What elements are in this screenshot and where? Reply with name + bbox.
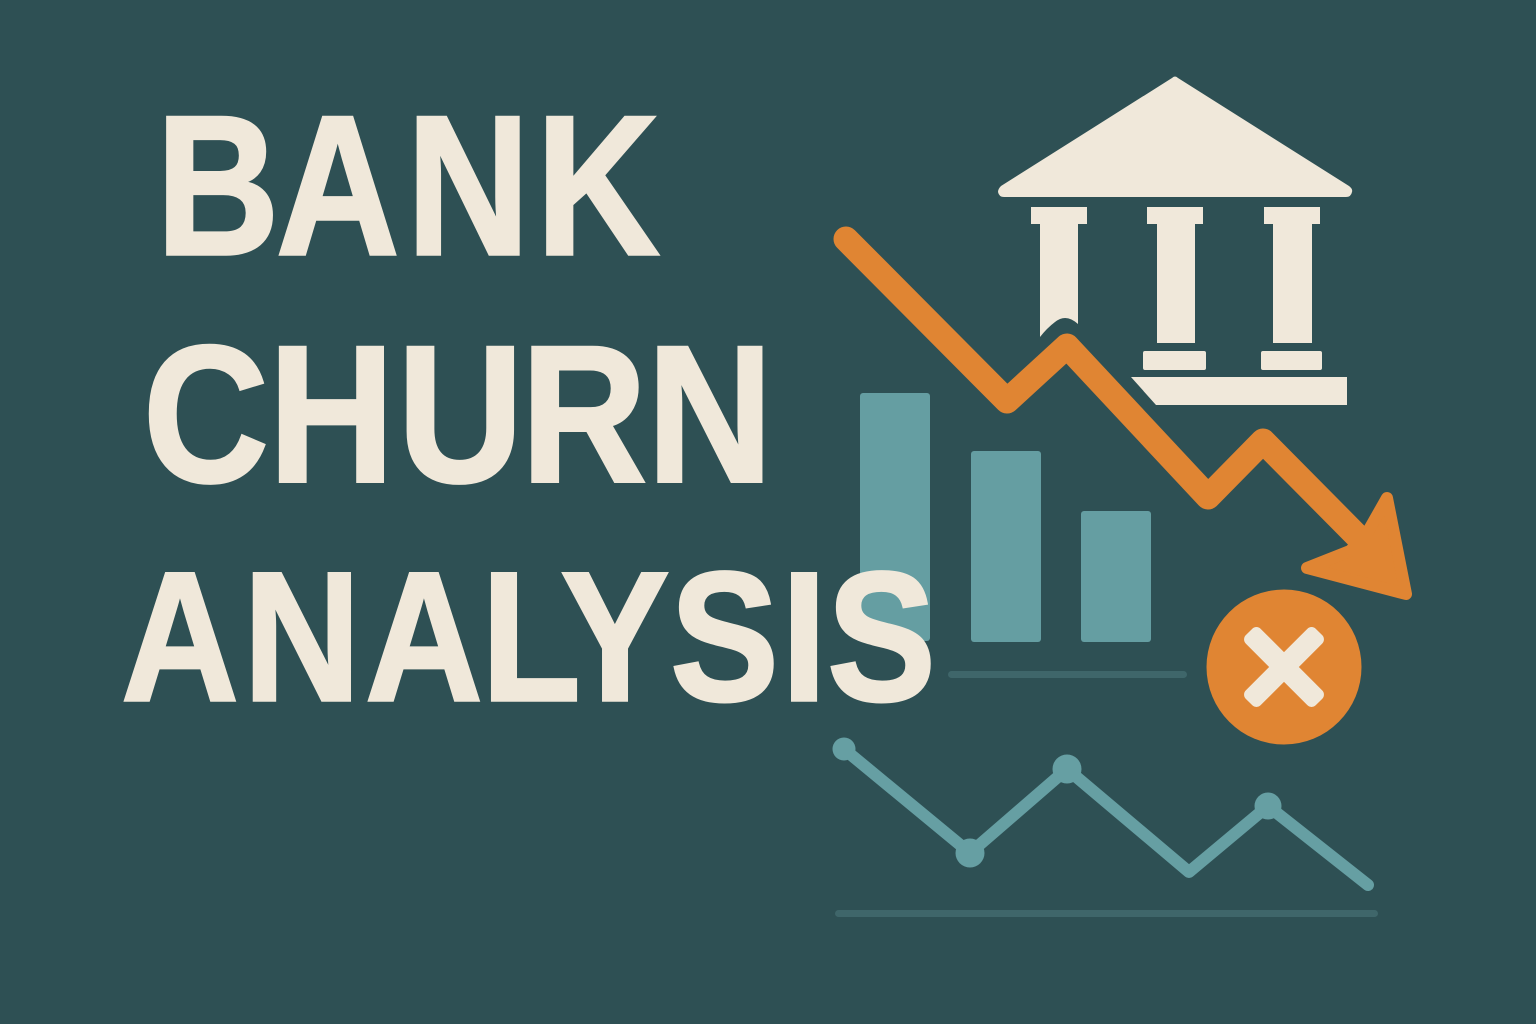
title line: CHURN: CHURN [143, 305, 773, 524]
title line: ANALYSIS: ANALYSIS [121, 534, 936, 739]
icon: orange circle with cross [1206, 590, 1362, 744]
icon: bank building [998, 76, 1352, 405]
title line: BANK: BANK [156, 75, 659, 297]
title [121, 75, 936, 739]
line chart [832, 738, 1378, 917]
bar chart [860, 393, 1187, 678]
arrow: falling orange trend [846, 239, 1406, 594]
